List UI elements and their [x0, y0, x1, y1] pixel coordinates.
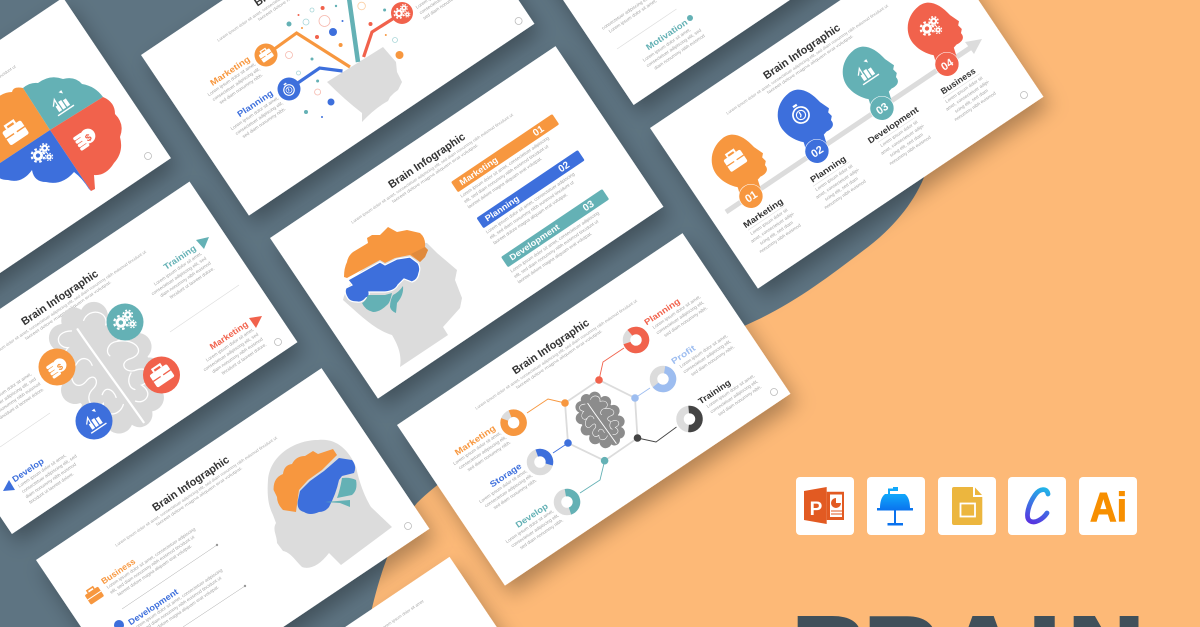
brain quadrant: red	[50, 97, 122, 191]
text: develop: consectetuer adipiscing elit,	[510, 513, 560, 548]
node: gears	[106, 304, 144, 340]
divider	[170, 285, 239, 332]
text: marketing: consectetuer adipiscing elit, sed	[202, 331, 260, 372]
text: training: diam nonummy nibh euismod	[159, 260, 212, 298]
text: motivation: consectetuer adipiscing elit, sed	[645, 27, 703, 68]
text: planning: scing elit, sed diam	[824, 176, 859, 202]
head 04	[898, 0, 982, 83]
title: Lorem ipsum dolor sit amet, consectetuer adipiscing elit, sed diam nonummy nibh euismod tincidunt ut	[725, 3, 890, 116]
text: marketing	[201, 52, 265, 108]
text: planning: Lorem ipsum dolor sit	[814, 163, 854, 192]
bar: marketing	[451, 114, 571, 209]
text: planning: sed diam nonummy nibh.	[663, 305, 708, 338]
text: training: tincidunt ut laoreet dolore.	[169, 266, 215, 300]
panel: exploding head slide	[141, 0, 534, 216]
text: storage	[472, 458, 538, 515]
text: left fragment	[0, 370, 45, 428]
text: training: consectetuer adipiscing elit, sed	[150, 255, 208, 296]
text: planning: Planning	[235, 88, 275, 119]
text: business: scing elit, sed diam	[954, 88, 989, 114]
head silhouette	[268, 440, 392, 568]
text: storage: sed diam nonummy nibh.	[492, 478, 538, 510]
text: marketing: Marketing	[741, 196, 785, 230]
panel: timeline slide	[650, 0, 1043, 289]
page number	[515, 18, 522, 24]
text: storage: consectetuer adipiscing elit,	[484, 473, 533, 508]
text: marketing: amet, consectetuer adipi-	[750, 211, 796, 244]
text: training	[141, 240, 216, 307]
text: training: Lorem ipsum dolor sit amet,	[153, 251, 203, 287]
text: business	[99, 518, 203, 600]
background: peach shape	[368, 0, 1200, 627]
title: Brain Infographic	[150, 454, 232, 514]
text: develop: Develop	[514, 501, 550, 530]
text: development	[866, 104, 936, 169]
title: laoreet dolore magna aliquam erat volutpat.	[155, 465, 243, 527]
title: Brain Infographic	[386, 131, 468, 191]
text: develop	[10, 439, 85, 505]
page number	[404, 522, 412, 530]
text: business: laoreet dolore magna aliquam erat volutpat.	[116, 543, 193, 597]
panel: center brain slide	[270, 46, 663, 399]
text: training: sed diam nonummy nibh.	[717, 384, 762, 417]
bar: planning: elit, sed diam nonummy nibh euismod tincidunt ut	[488, 179, 575, 240]
text: planning: consectetuer adipiscing elit,	[655, 300, 705, 335]
text: marketing: Lorem ipsum dolor sit amet,	[452, 430, 502, 466]
brain: teal lobe	[362, 293, 392, 312]
hexagon nodes	[561, 376, 641, 465]
title: Brain Infographic	[761, 22, 843, 82]
bar: planning: Planning	[483, 193, 521, 223]
brain: orange lobe	[274, 449, 337, 512]
text: marketing	[446, 420, 512, 477]
text: training: Lorem ipsum dolor sit amet,	[706, 373, 756, 409]
panel: outlined brain slide	[0, 182, 297, 534]
text: planning	[224, 86, 288, 142]
tile: Illustrator	[1079, 477, 1137, 535]
brain: teal lobe	[337, 478, 356, 498]
head silhouette	[343, 243, 462, 367]
text: develop: Lorem ipsum dolor sit amet,	[17, 453, 67, 489]
text: marketing: scing elit, sed diam	[759, 220, 794, 246]
head 02	[768, 79, 852, 170]
bar: development: 03	[581, 199, 597, 214]
text: develop: Develop	[10, 456, 46, 484]
title: laoreet dolore magna aliquam erat volutpat.	[515, 328, 603, 390]
hexagon	[565, 380, 638, 461]
tile: Illustrator: Ai	[1090, 484, 1127, 530]
bar: development: Lorem ipsum dolor sit amet, consectetuer adipiscing	[509, 210, 600, 274]
text: planning	[804, 150, 868, 211]
brain: orange lobe	[344, 227, 428, 278]
marker: develop triangle	[3, 480, 15, 491]
text: marketing: Marketing	[453, 423, 497, 457]
donut: profit	[652, 368, 674, 390]
head 01: 01	[743, 189, 760, 206]
divider dot	[216, 544, 218, 546]
connector lines	[266, 0, 402, 89]
text: planning: consectetuer adipiscing elit,	[234, 100, 284, 136]
panel: head with brain slide	[36, 368, 429, 627]
bar: marketing: Marketing	[457, 155, 500, 187]
software tiles row	[796, 477, 1137, 535]
text: storage: Lorem ipsum dolor sit amet,	[478, 468, 528, 504]
icon: gears	[29, 142, 56, 168]
text: develop: diam nonummy nibh euismod	[24, 461, 77, 499]
node: briefcase	[143, 356, 180, 394]
donut: planning	[623, 327, 649, 353]
tile: PowerPoint	[796, 477, 854, 535]
text: develop: consectetuer adipiscing elit, sed	[21, 453, 78, 494]
text: planning	[642, 285, 709, 343]
icon: stopwatch	[280, 81, 296, 97]
text: planning: nonummy nibh euismod	[823, 178, 867, 210]
bar: marketing: 01	[531, 124, 547, 139]
text: profit	[669, 324, 736, 382]
bar: planning	[476, 150, 596, 245]
divider	[122, 545, 217, 609]
page number	[770, 388, 778, 396]
title: Lorem ipsum dolor sit amet, consectetuer adipiscing elit, sed diam nonummy nibh euismod tincidunt ut	[474, 298, 639, 411]
page number	[1020, 92, 1028, 98]
node: coins	[38, 348, 76, 386]
bar: marketing: Lorem ipsum dolor sit amet, consectetuer adipiscing	[459, 135, 550, 199]
icon: development	[114, 620, 124, 627]
text: develop: sed diam nonummy nibh.	[519, 518, 564, 550]
brain quadrant: teal	[23, 77, 103, 130]
title: laoreet dolore magna aliquam erat volutpat.	[391, 142, 479, 204]
brain: blue lobe	[298, 458, 355, 514]
text: development: Lorem ipsum dolor sit	[879, 119, 919, 148]
head 02: 02	[809, 144, 826, 161]
text: business: elit, sed diam nonummy nibh euismod tincidunt ut	[109, 534, 196, 595]
divider	[0, 413, 50, 447]
panel: bottom slide	[164, 557, 557, 627]
text: business: Lorem ipsum dolor sit amet, consectetuer adipiscing	[106, 526, 197, 590]
text: motivation: diam nonummy nibh euismod	[653, 33, 706, 71]
donut: storage	[528, 450, 552, 474]
confetti dots	[286, 2, 404, 118]
text: marketing: nonummy nibh euismod	[758, 222, 802, 254]
node: planning	[278, 78, 300, 100]
text: marketing: consectetuer adipiscing elit,	[211, 66, 261, 102]
text: development: nonummy nibh euismod	[888, 134, 932, 166]
bar: planning: Lorem ipsum dolor sit amet, consectetuer adipiscing	[485, 171, 576, 235]
brain illustration	[24, 281, 188, 455]
brain: orange shaded corner	[411, 247, 428, 262]
head 03	[833, 36, 917, 127]
bar: planning: 02	[557, 160, 572, 175]
page number	[274, 338, 282, 346]
connectors	[527, 348, 676, 493]
icon: briefcase	[257, 46, 274, 63]
text: marketing: sed diam nonummy nibh.	[466, 440, 512, 472]
panel: hexagon slide	[397, 233, 790, 586]
title: laoreet dolore magna aliquam erat volutpat.	[766, 33, 854, 95]
text: marketing: Lorem ipsum dolor sit amet,	[207, 61, 257, 97]
icon: briefcase	[0, 117, 29, 146]
text: business: Lorem ipsum dolor sit	[944, 75, 984, 104]
text: develop: Lorem ipsum dolor sit amet,	[505, 508, 555, 544]
text: business: Business	[99, 556, 137, 586]
text: profit: Lorem ipsum dolor sit amet,	[679, 333, 729, 369]
brain quadrant: orange	[0, 88, 50, 165]
text: marketing: Marketing	[208, 54, 252, 88]
brain quadrant: blue	[0, 130, 91, 191]
text: training: consectetuer adipiscing elit,	[709, 379, 759, 414]
page number	[144, 152, 152, 160]
text: marketing: Lorem ipsum dolor sit	[749, 207, 789, 236]
divider	[183, 586, 245, 627]
text: business: nonummy nibh euismod	[953, 90, 997, 122]
bar: marketing: elit, sed diam nonummy nibh euismod tincidunt ut	[463, 143, 550, 204]
title: Brain Infographic	[19, 268, 101, 328]
icon: gears	[392, 3, 412, 23]
text: marketing: diam nonummy nibh euismod	[211, 336, 264, 374]
text: marketing: tincidunt ut laoreet dolore.	[221, 342, 267, 376]
bar: planning: laoreet dolore magna aliquam erat volutpat.	[492, 192, 568, 245]
title: laoreet dolore magna aliquam erat volutpat.	[24, 279, 112, 341]
title: Lorem ipsum dolor sit amet, consectetuer adipiscing elit, sed diam nonummy nibh euismod tincidunt ut	[114, 435, 279, 548]
divider dot	[244, 585, 246, 587]
marker dot	[687, 15, 693, 21]
brain: stem	[390, 286, 403, 313]
icon: briefcase	[83, 584, 104, 605]
text: develop: tincidunt ut laoreet dolore.	[28, 471, 75, 505]
text: development: Development	[126, 586, 180, 627]
marker: training triangle	[196, 237, 209, 249]
text: development: scing elit, sed diam	[889, 132, 924, 158]
node: coins: $	[55, 361, 65, 373]
tile: Keynote	[867, 477, 925, 535]
icon: coins: $	[83, 132, 95, 145]
donut: marketing	[501, 410, 526, 435]
center brain	[565, 383, 635, 457]
text: planning: Planning	[808, 153, 848, 185]
text: marketing: consectetuer adipiscing elit,	[458, 435, 507, 470]
text: marketing: sed diam nonummy nibh.	[218, 72, 264, 105]
text: develop	[499, 498, 564, 555]
panel: motivation slide	[526, 0, 919, 105]
head 04: 04	[939, 56, 957, 74]
tile: Canva	[1008, 477, 1066, 535]
head silhouette	[327, 47, 402, 122]
text: development: Development	[866, 104, 920, 146]
text: planning: amet, consectetuer adipi-	[815, 167, 861, 200]
donut: training	[679, 409, 700, 429]
title: Lorem ipsum dolor sit amet, consectetuer adipiscing elit, sed diam nonummy nibh euismod tincidunt ut	[350, 112, 515, 225]
text: planning: Planning	[642, 296, 682, 327]
text: marketing	[193, 316, 268, 383]
text: business	[934, 62, 998, 123]
text: profit: sed diam nonummy nibh.	[690, 344, 735, 377]
divider	[617, 9, 676, 49]
node: marketing	[254, 44, 278, 66]
node: chart	[76, 402, 112, 440]
brain: blue lobe	[345, 257, 420, 302]
text: business: Business	[939, 66, 978, 96]
icon: coins	[72, 126, 99, 151]
icon: chart	[47, 89, 74, 116]
text: training: Training	[162, 243, 198, 272]
text: business: amet, consectetuer adipi-	[945, 79, 991, 112]
text: planning: Lorem ipsum dolor sit amet,	[652, 294, 702, 330]
node: top right	[391, 2, 413, 24]
brain: stem	[325, 500, 350, 507]
bar: development: laoreet dolore magna aliquam erat volutpat.	[517, 231, 593, 284]
bar: development: elit, sed diam nonummy nibh euismod tincidunt ut	[513, 218, 600, 279]
head 03: 03	[874, 101, 891, 118]
text: training	[696, 364, 763, 422]
text: marketing: Lorem ipsum dolor sit amet,	[205, 327, 255, 363]
bar: marketing: laoreet dolore magna aliquam erat volutpat.	[467, 156, 543, 209]
title: Brain Infographic	[510, 317, 592, 377]
text: training: Training	[696, 377, 732, 406]
donut: develop	[556, 491, 578, 513]
text: motivation: Lorem ipsum dolor sit amet,	[642, 27, 692, 63]
text: planning: Lorem ipsum dolor sit amet,	[230, 95, 280, 131]
timeline arrow	[726, 39, 982, 212]
text: marketing	[739, 194, 803, 255]
tile: PowerPoint: P	[810, 499, 823, 520]
text: planning: sed diam nonummy nibh.	[241, 106, 287, 139]
bar: development	[501, 189, 621, 284]
panel: brain quadrant slide	[0, 0, 171, 350]
tile: Google Slides	[938, 477, 996, 535]
text: motivation	[636, 13, 706, 73]
text: profit: consectetuer adipiscing elit,	[682, 339, 732, 374]
text: storage: Storage	[488, 461, 524, 489]
text: marketing: Marketing	[208, 319, 250, 352]
bar: development: Development	[507, 222, 561, 262]
marker: marketing triangle	[249, 316, 262, 328]
text: motivation: Motivation	[644, 17, 689, 52]
text: development: amet, consectetuer adipi-	[880, 123, 926, 156]
text: profit: Profit	[669, 343, 697, 366]
head 01	[702, 124, 786, 215]
